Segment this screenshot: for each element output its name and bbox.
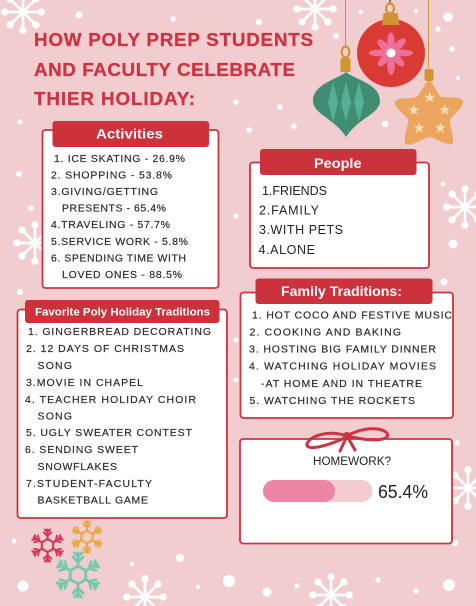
ornament: red ball <box>357 0 425 87</box>
list: people: 3.WITH PETS <box>259 223 343 237</box>
icon: red bow <box>307 429 388 451</box>
list: family traditions: 5. WATCHING THE ROCKETS <box>250 395 415 407</box>
list: activities: 1. ICE SKATING - 26.9% <box>54 153 185 165</box>
list: people: 1.FRIENDS <box>262 184 327 198</box>
ornament: green drop <box>313 0 380 137</box>
title <box>34 29 313 109</box>
list: favorite traditions: SNOWFLAKES <box>38 461 117 473</box>
heading: favorite traditions: Favorite Poly Holiday Traditions <box>35 306 210 318</box>
panel: homework <box>240 429 452 544</box>
heading: people: People <box>314 155 362 171</box>
panel: activities <box>42 121 218 288</box>
list: activities: 6. SPENDING TIME WITH <box>51 252 186 264</box>
heading: family traditions: Family Traditions: <box>281 283 402 299</box>
list: people <box>258 184 343 257</box>
value: 65.4%: 65.4% <box>378 482 428 502</box>
list: activities: PRESENTS - 65.4% <box>62 202 166 214</box>
list: activities <box>51 153 188 281</box>
list: favorite traditions: 6. SENDING SWEET <box>25 444 139 456</box>
list: family traditions: 3. HOSTING BIG FAMILY DINNER <box>249 344 436 356</box>
title: AND FACULTY CELEBRATE <box>34 59 295 80</box>
icon: orange snowflake <box>72 521 102 553</box>
list: favorite traditions: 1. GINGERBREAD DECORATING <box>28 326 211 338</box>
list: favorite traditions: 3.MOVIE IN CHAPEL <box>26 377 143 389</box>
list: family traditions: 1. HOT COCO AND FESTIVE MUSIC <box>252 310 452 322</box>
list: favorite traditions: 5. UGLY SWEATER CONTEST <box>26 427 193 439</box>
list: favorite traditions <box>25 326 211 506</box>
ornaments <box>313 0 463 145</box>
list: favorite traditions: 4. TEACHER HOLIDAY CHOIR <box>25 394 196 406</box>
list: people: 4.ALONE <box>258 243 315 257</box>
list: favorite traditions: SONG <box>38 410 72 422</box>
list: activities: LOVED ONES - 88.5% <box>62 269 182 281</box>
list: family traditions: 4. WATCHING HOLIDAY MOVIES <box>249 360 436 372</box>
list: favorite traditions: SONG <box>38 360 72 372</box>
list: family traditions <box>249 310 452 407</box>
heading: people <box>260 149 416 175</box>
heading: favorite traditions <box>25 300 220 323</box>
panel: favorite traditions <box>18 300 227 518</box>
list: activities: 4.TRAVELING - 57.7% <box>51 219 170 231</box>
list: favorite traditions: 7.STUDENT-FACULTY <box>26 478 152 490</box>
heading: activities <box>52 121 209 147</box>
list: favorite traditions: BASKETBALL GAME <box>38 494 148 506</box>
title: THIER HOLIDAY: <box>34 88 195 109</box>
heading: family traditions <box>256 278 432 304</box>
icon: colored snowflakes <box>32 521 102 597</box>
title: HOW POLY PREP STUDENTS <box>34 29 313 50</box>
ornament: orange star <box>395 0 463 145</box>
panel: people <box>250 149 429 268</box>
label: homework: HOMEWORK? <box>313 456 391 468</box>
list: people: 2.FAMILY <box>259 204 320 218</box>
heading: activities: Activities <box>96 126 163 142</box>
list: family traditions: -AT HOME AND IN THEATRE <box>261 378 422 390</box>
list: favorite traditions: 2. 12 DAYS OF CHRISTMAS <box>26 343 184 355</box>
icon: red snowflake <box>32 529 63 562</box>
list: activities: 5.SERVICE WORK - 5.8% <box>51 236 188 248</box>
list: activities: 3.GIVING/GETTING <box>51 186 158 198</box>
list: family traditions: 2. COOKING AND BAKING <box>250 326 401 338</box>
progress bar <box>263 480 372 502</box>
icon: green snowflake <box>56 553 100 597</box>
panel: family traditions <box>240 278 453 418</box>
list: activities: 2. SHOPPING - 53.8% <box>51 170 172 182</box>
